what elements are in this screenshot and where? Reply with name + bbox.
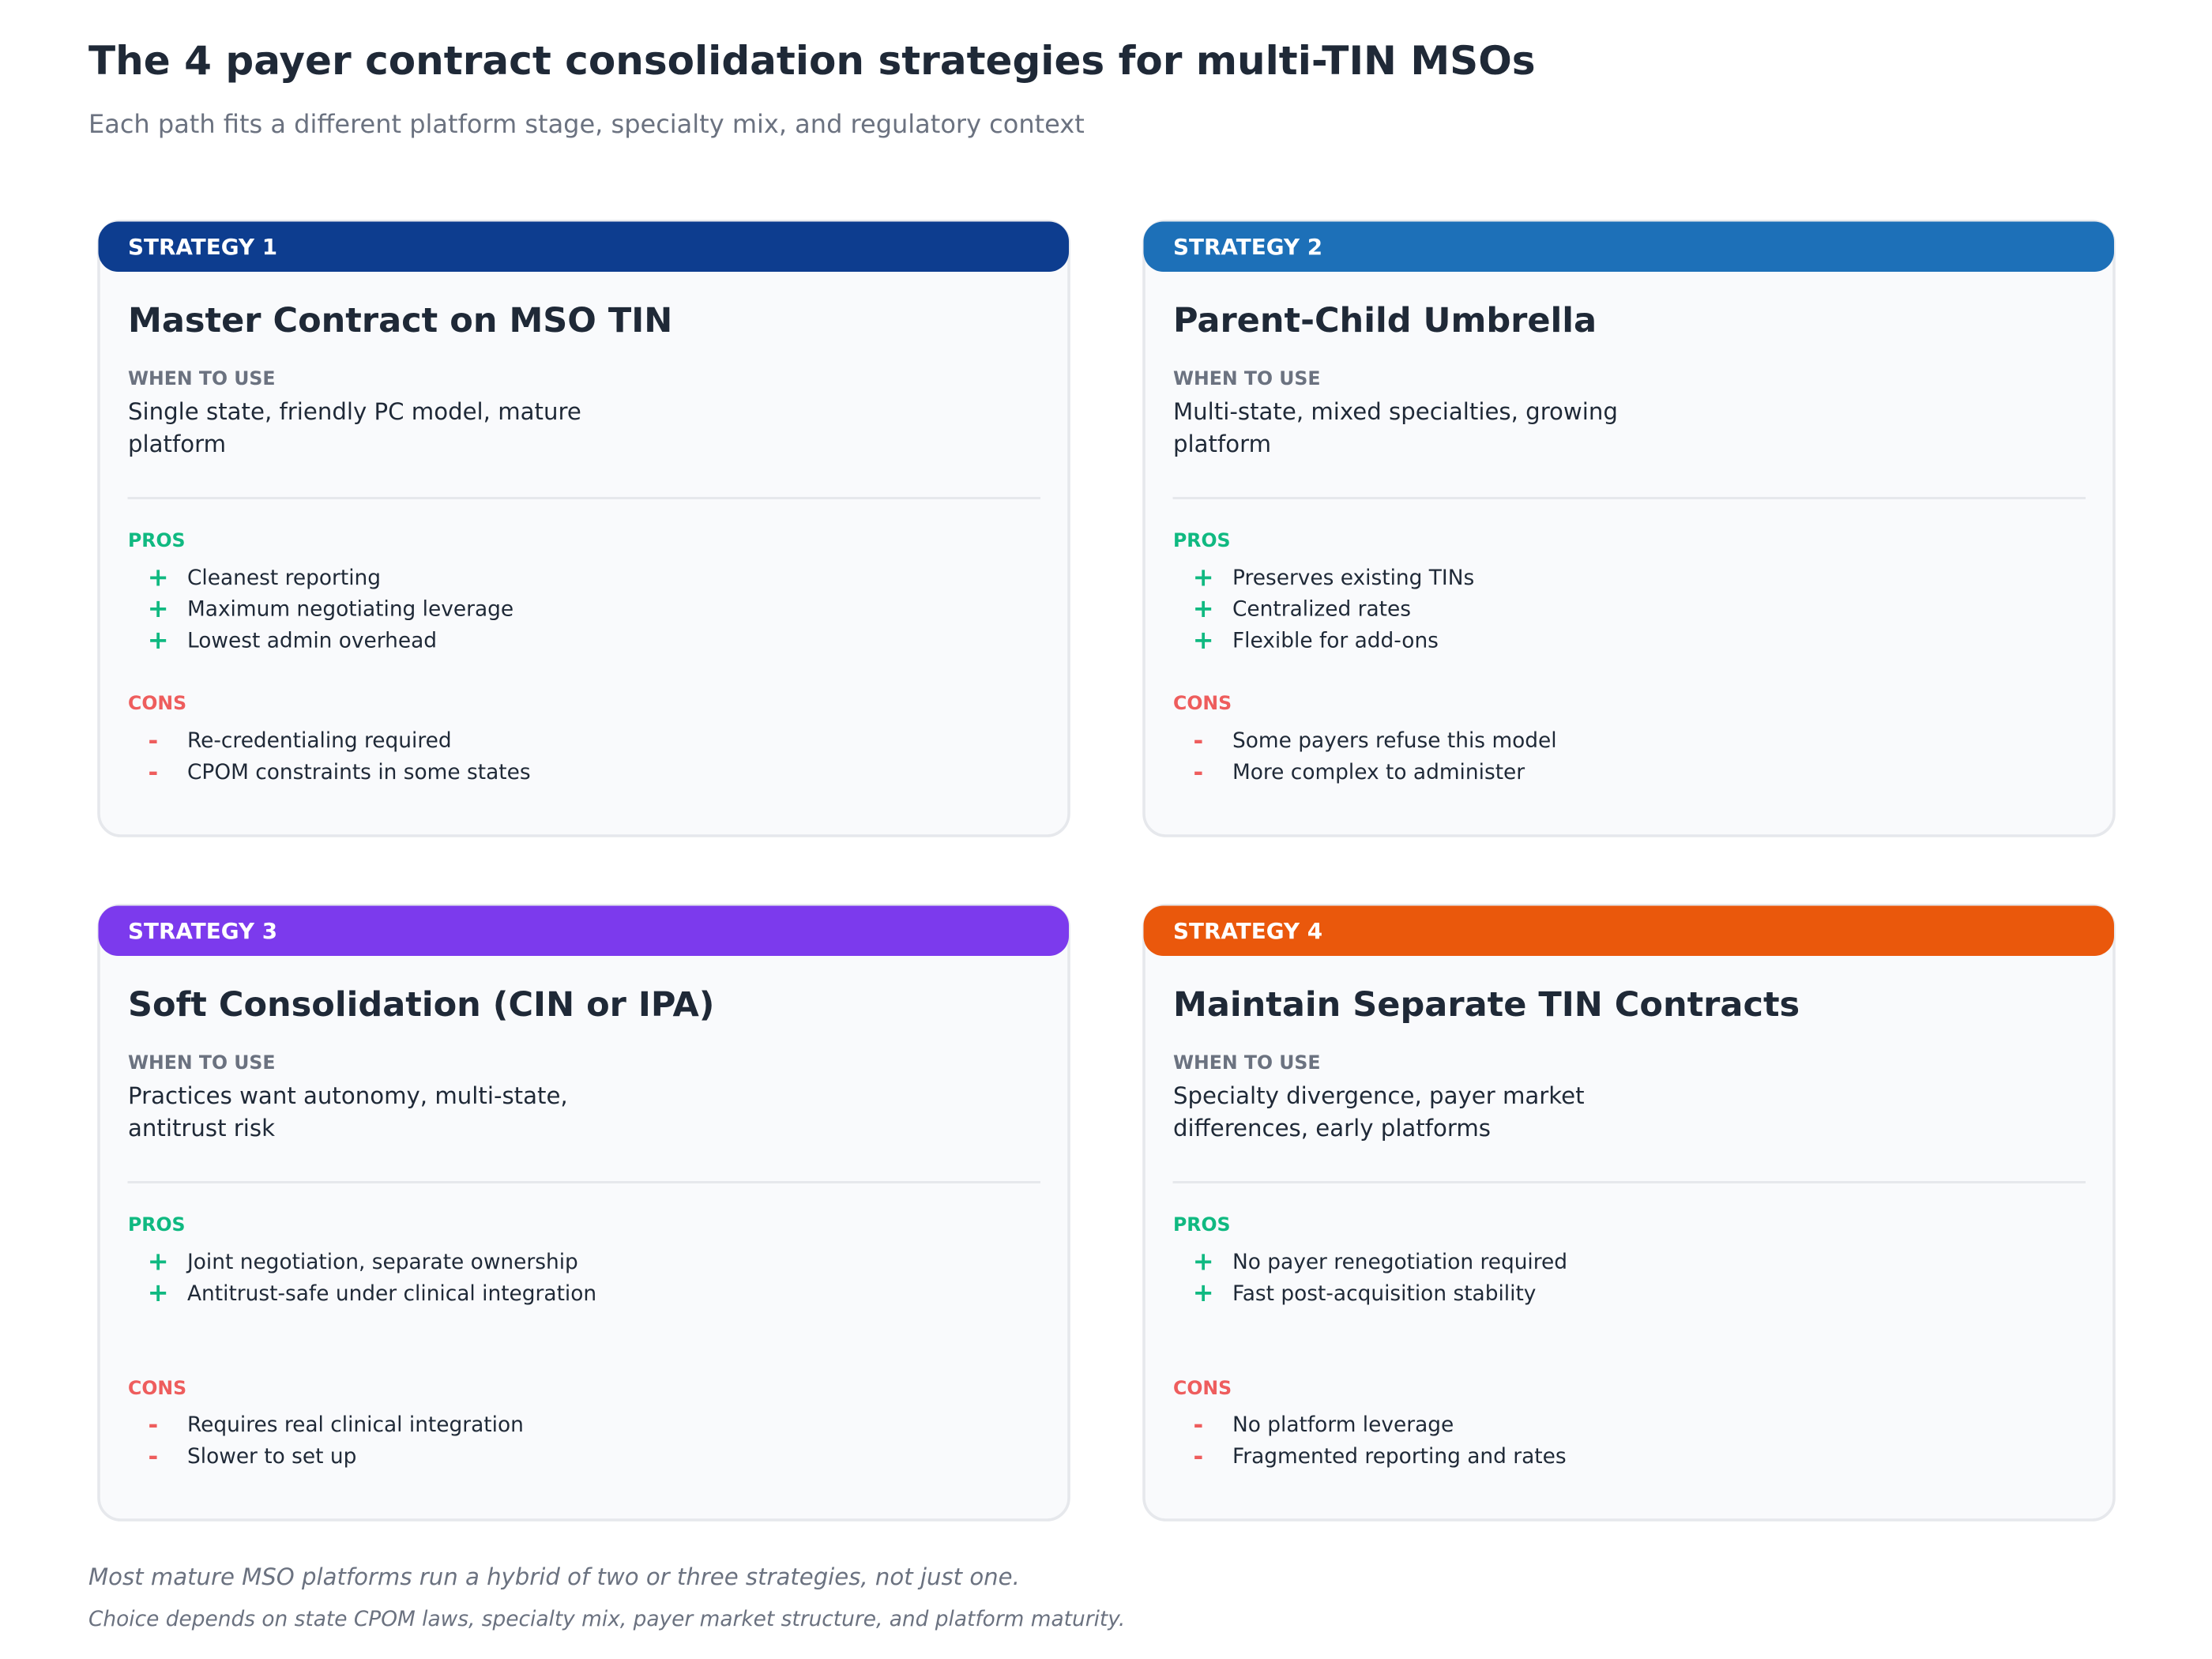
cons list bbox=[149, 1411, 524, 1471]
pros list bbox=[1193, 562, 1474, 655]
cons list: - bbox=[149, 1443, 158, 1471]
cons list: CPOM constraints in some states bbox=[187, 760, 531, 784]
cons label: CONS bbox=[1173, 692, 1232, 714]
card background bbox=[99, 221, 1069, 836]
when to use label: WHEN TO USE bbox=[128, 367, 275, 389]
cons label: CONS bbox=[1173, 1377, 1232, 1399]
cons list: Fragmented reporting and rates bbox=[1232, 1444, 1567, 1469]
header band: strategy 4 bbox=[1144, 905, 2114, 956]
pros label: PROS bbox=[128, 1213, 186, 1236]
header band: strategy 2 bbox=[1144, 221, 2114, 272]
when to use label: WHEN TO USE bbox=[1173, 367, 1320, 389]
strategy name: Master Contract on MSO TIN bbox=[128, 301, 672, 340]
strategy name: Soft Consolidation (CIN or IPA) bbox=[128, 985, 714, 1025]
cons list bbox=[1193, 727, 1557, 787]
subtitle: Each path fits a different platform stage, specialty mix, and regulatory context bbox=[88, 109, 1085, 139]
pros list: Maximum negotiating leverage bbox=[187, 597, 514, 621]
cons list: More complex to administer bbox=[1232, 760, 1525, 784]
cons list: - bbox=[149, 1411, 158, 1439]
when to use text: Specialty divergence, payer market bbox=[1173, 1082, 1585, 1109]
panel: strategy 3 bbox=[98, 905, 1069, 1520]
header label: STRATEGY 2 bbox=[1173, 234, 1322, 260]
header label: STRATEGY 1 bbox=[128, 234, 277, 260]
card background bbox=[99, 905, 1069, 1520]
header band: strategy 3 bbox=[98, 905, 1069, 956]
header label: STRATEGY 4 bbox=[1173, 918, 1322, 944]
cons list: Slower to set up bbox=[187, 1444, 356, 1469]
cons list: - bbox=[1193, 727, 1203, 755]
pros list: Cleanest reporting bbox=[187, 566, 381, 590]
when to use text: platform bbox=[1173, 431, 1271, 457]
header label: STRATEGY 3 bbox=[128, 918, 277, 944]
pros list bbox=[148, 562, 514, 655]
footnote: decision factors: Choice depends on state CPOM laws, specialty mix, payer market structure, and platform maturity. bbox=[88, 1607, 1125, 1631]
pros label: PROS bbox=[1173, 1213, 1231, 1236]
pros list: + bbox=[148, 593, 169, 623]
cons list: - bbox=[149, 758, 158, 787]
cons list: Some payers refuse this model bbox=[1232, 728, 1557, 753]
pros list: Centralized rates bbox=[1232, 597, 1411, 621]
when to use text: Multi-state, mixed specialties, growing bbox=[1173, 398, 1618, 425]
title: The 4 payer contract consolidation strategies for multi-TIN MSOs bbox=[88, 38, 1536, 84]
pros list: + bbox=[148, 1277, 169, 1307]
pros list: Joint negotiation, separate ownership bbox=[186, 1250, 578, 1274]
cons list: - bbox=[149, 727, 158, 755]
cons list: No platform leverage bbox=[1232, 1413, 1454, 1437]
pros list: + bbox=[1193, 1247, 1214, 1277]
when to use label: WHEN TO USE bbox=[1173, 1051, 1320, 1074]
pros list: + bbox=[1193, 1277, 1214, 1307]
panel: strategy 1 bbox=[98, 221, 1069, 836]
pros list: Antitrust-safe under clinical integration bbox=[187, 1281, 596, 1306]
pros list: Fast post-acquisition stability bbox=[1232, 1281, 1536, 1306]
header band: strategy 1 bbox=[98, 221, 1069, 272]
when to use text: differences, early platforms bbox=[1173, 1115, 1491, 1142]
cons list: - bbox=[1193, 758, 1203, 787]
pros list bbox=[148, 1247, 596, 1307]
pros list bbox=[1193, 1247, 1567, 1307]
cons list bbox=[1193, 1411, 1567, 1471]
cons list: Requires real clinical integration bbox=[187, 1413, 524, 1437]
when to use text: platform bbox=[128, 431, 226, 457]
cons list: - bbox=[1193, 1443, 1203, 1471]
when to use text: Single state, friendly PC model, mature bbox=[128, 398, 581, 425]
cons list: Re-credentialing required bbox=[187, 728, 452, 753]
pros list: Flexible for add-ons bbox=[1232, 629, 1439, 653]
footnote: takeaway: Most mature MSO platforms run a hybrid of two or three strategies, not just one. bbox=[88, 1563, 1020, 1590]
pros label: PROS bbox=[1173, 529, 1231, 551]
pros list: No payer renegotiation required bbox=[1232, 1250, 1567, 1274]
card background bbox=[1144, 905, 2114, 1520]
strategy name: Maintain Separate TIN Contracts bbox=[1173, 985, 1800, 1025]
pros list: + bbox=[1193, 562, 1214, 592]
pros list: + bbox=[148, 625, 169, 655]
pros label: PROS bbox=[128, 529, 186, 551]
strategy name: Parent-Child Umbrella bbox=[1173, 301, 1597, 340]
when to use text: antitrust risk bbox=[128, 1115, 275, 1142]
when to use text: Practices want autonomy, multi-state, bbox=[128, 1082, 568, 1109]
pros list: + bbox=[1193, 593, 1214, 623]
pros list: Lowest admin overhead bbox=[187, 629, 437, 653]
pros list: + bbox=[148, 562, 169, 592]
pros list: + bbox=[148, 1247, 169, 1277]
cons list bbox=[149, 727, 531, 787]
panel: strategy 4 bbox=[1144, 905, 2114, 1520]
panel: strategy 2 bbox=[1144, 221, 2114, 836]
cons label: CONS bbox=[128, 692, 186, 714]
pros list: + bbox=[1193, 625, 1214, 655]
cons label: CONS bbox=[128, 1377, 186, 1399]
pros list: Preserves existing TINs bbox=[1232, 566, 1474, 590]
card background bbox=[1144, 221, 2114, 836]
when to use label: WHEN TO USE bbox=[128, 1051, 275, 1074]
cons list: - bbox=[1193, 1411, 1203, 1439]
